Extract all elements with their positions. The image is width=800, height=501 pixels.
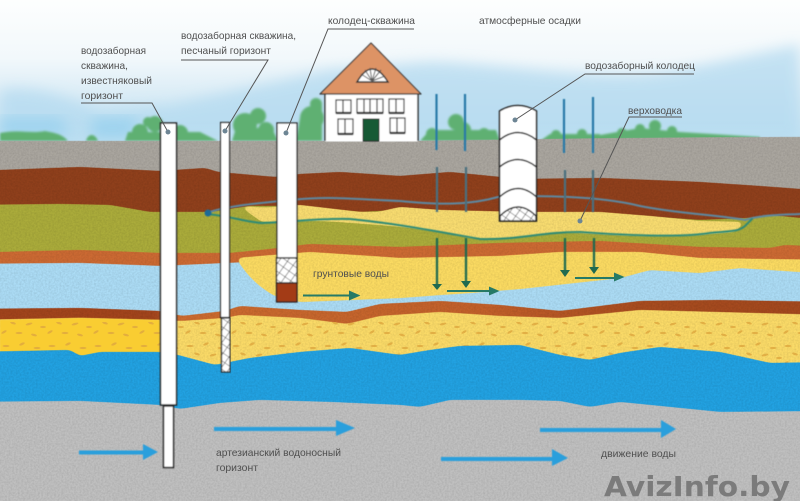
perched water lens — [238, 205, 745, 239]
label: intake well: водозаборный колодец — [585, 60, 695, 72]
borehole: limestone horizon — [160, 123, 176, 468]
label: sand borehole — [181, 30, 296, 134]
deep blue artesian water layer — [0, 345, 800, 430]
label: limestone borehole: скважина, — [81, 60, 128, 72]
soil: brown clay layer — [0, 167, 800, 230]
door — [363, 119, 379, 141]
label: shaft borehole: колодец-скважина — [328, 15, 415, 27]
artesian flow arrows — [79, 420, 676, 466]
label: water movement: движение воды — [601, 448, 676, 460]
label: limestone borehole — [81, 45, 170, 134]
label: perched water — [578, 105, 682, 224]
label: sand borehole: песчаный горизонт — [181, 45, 271, 57]
sky — [0, 0, 800, 145]
label: shaft borehole — [284, 15, 415, 136]
borehole: sand horizon — [220, 122, 230, 372]
sand layer with pebbles — [0, 310, 800, 380]
label: artesian horizon: артезианский водоносный — [216, 447, 341, 459]
label: intake well — [512, 60, 695, 122]
soil: clay band above sand — [0, 300, 800, 380]
intake well — [500, 106, 536, 221]
label: limestone borehole: горизонт — [81, 90, 123, 102]
light blue water layer — [0, 262, 800, 330]
soil: green loam layer — [0, 204, 800, 270]
label: limestone borehole: известняковый — [81, 75, 152, 87]
label: limestone borehole: водозаборная — [81, 45, 146, 57]
perched water lines — [204, 196, 800, 239]
attic window — [357, 69, 388, 82]
label: precipitation: атмосферные осадки — [479, 15, 581, 27]
soil: gray surface layer — [0, 137, 800, 200]
label: groundwater: грунтовые воды — [313, 268, 389, 280]
label: perched water: верховодка — [628, 105, 682, 117]
soil: orange clay layer — [0, 241, 800, 267]
rain arrowheads — [432, 267, 599, 290]
trees and grass — [0, 98, 760, 141]
shaft borehole — [276, 123, 297, 302]
groundwater sand — [236, 252, 800, 302]
label: artesian horizon — [216, 447, 341, 474]
label: sand borehole: водозаборная скважина, — [181, 30, 296, 42]
label: artesian horizon: горизонт — [216, 462, 258, 474]
gray bedrock layer — [0, 400, 800, 501]
groundwater flow arrows — [303, 274, 622, 299]
house — [320, 43, 421, 142]
rain lines — [436, 94, 594, 288]
bedrock base fill — [0, 420, 800, 501]
